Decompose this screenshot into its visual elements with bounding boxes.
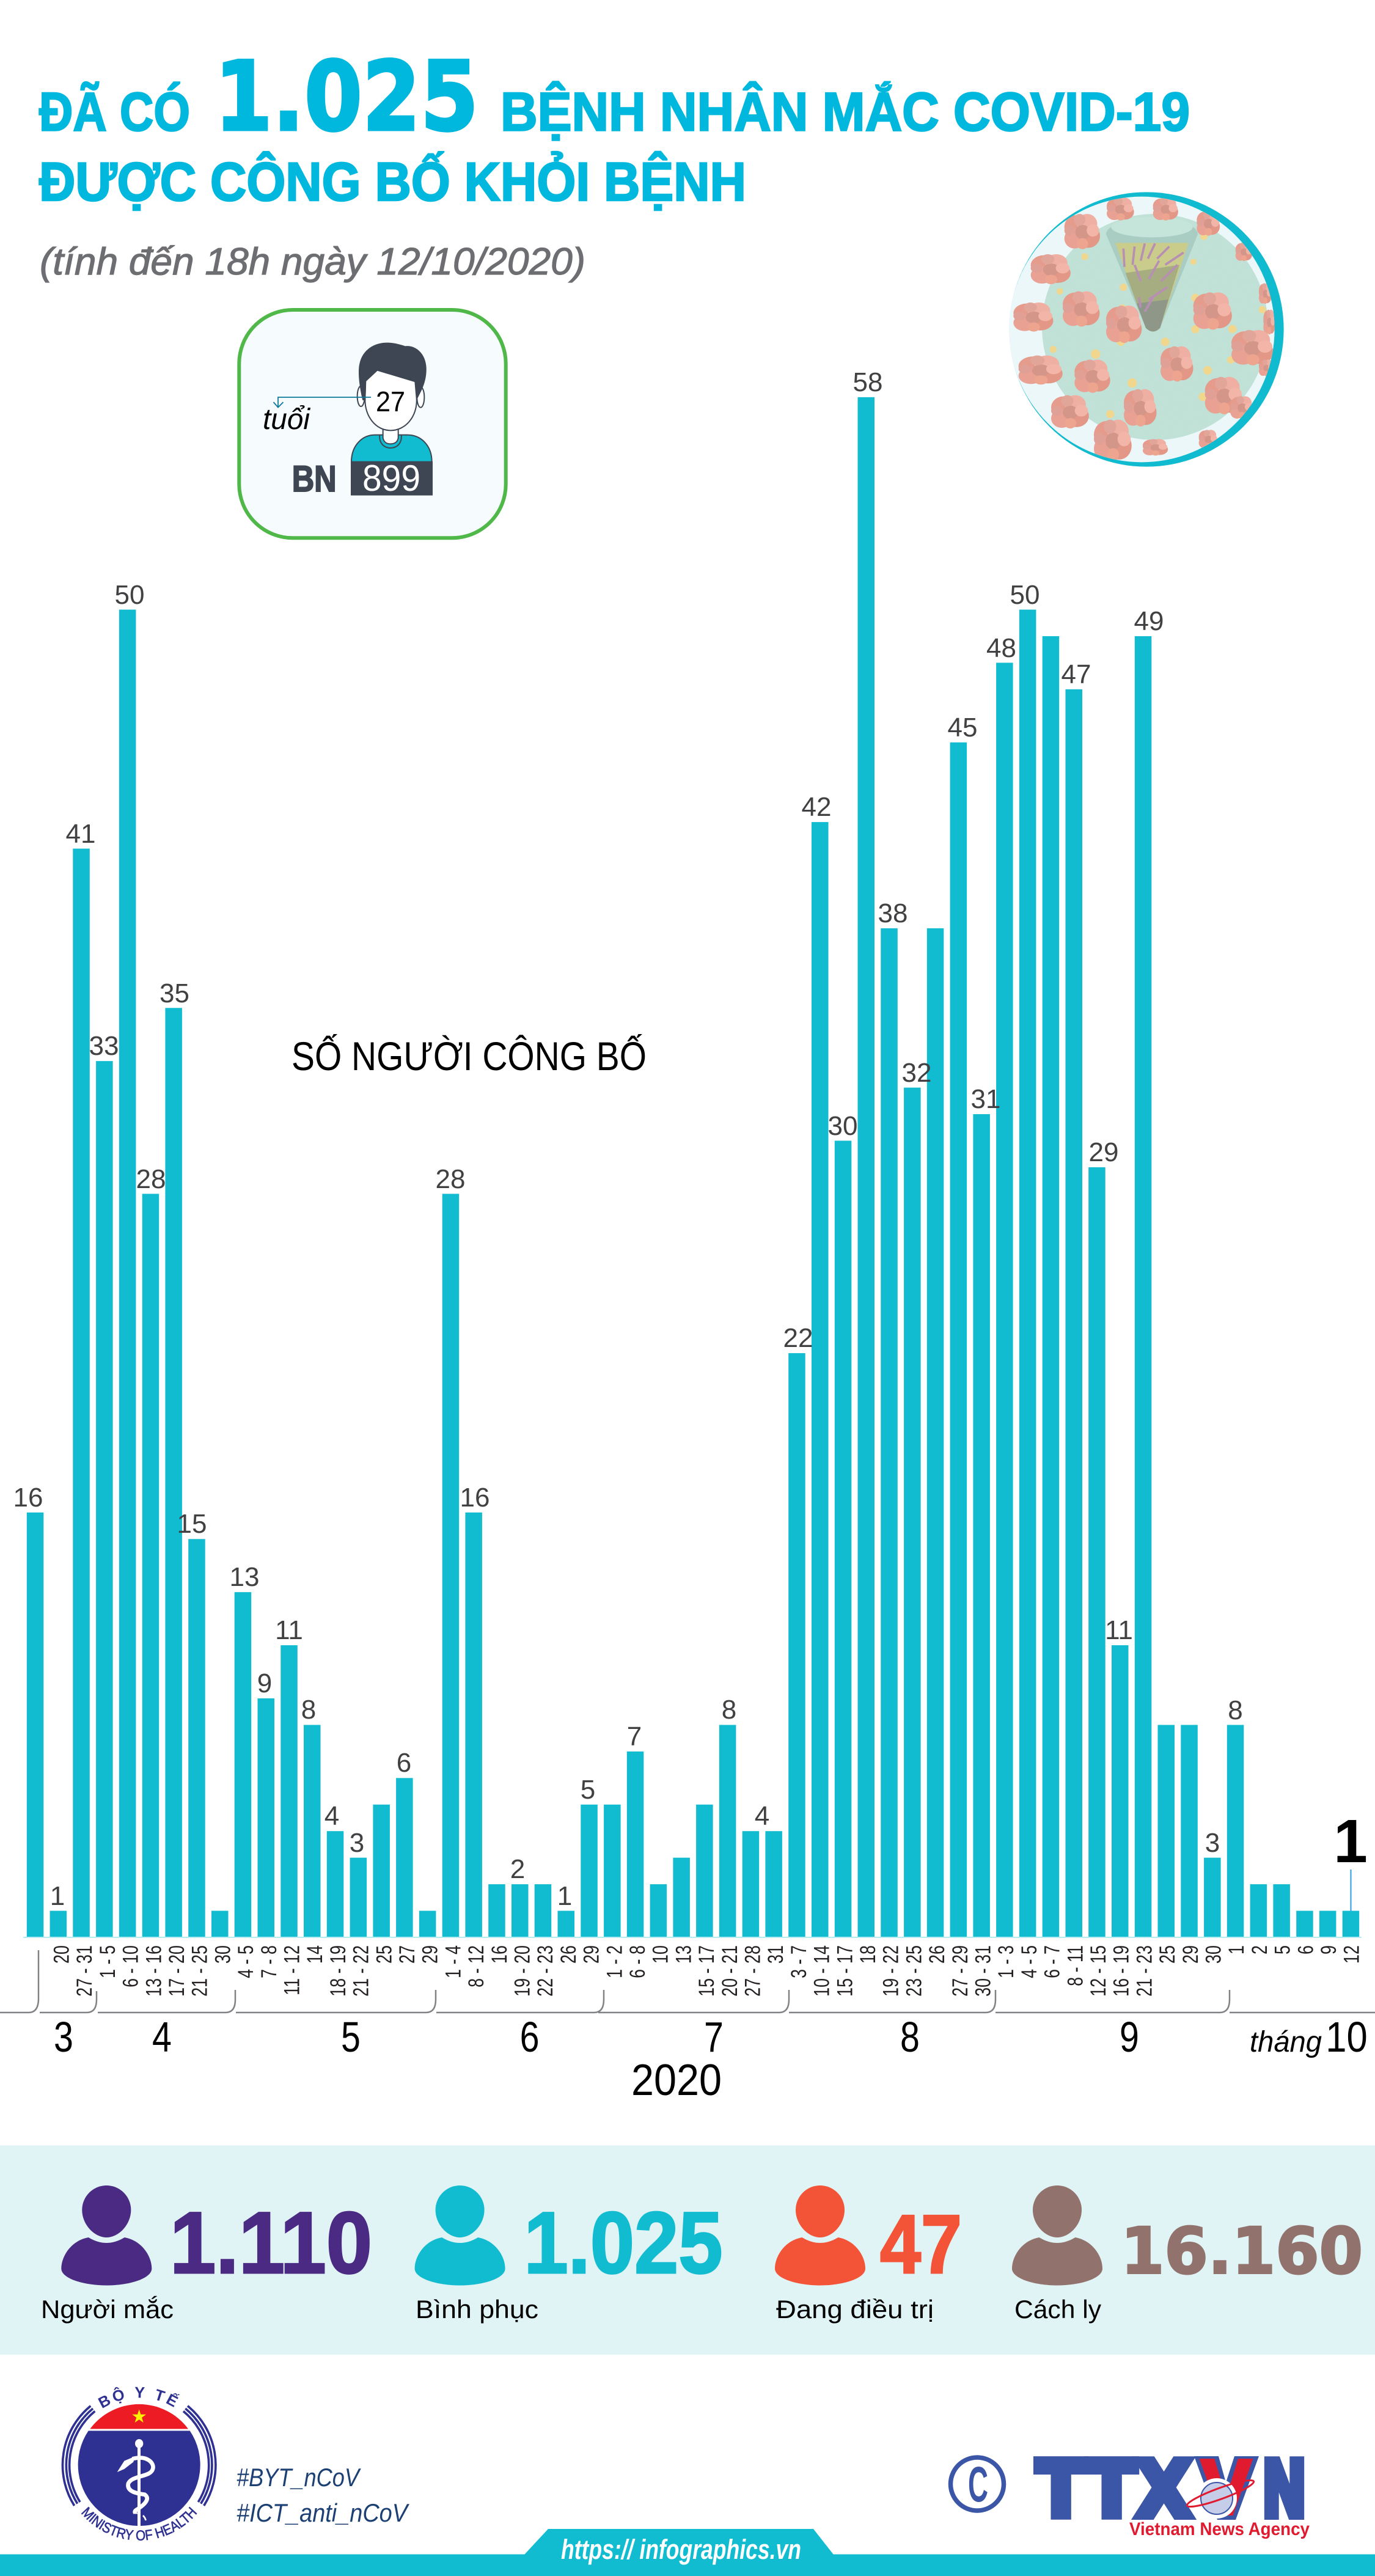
stat: recovered: Bình phục	[416, 2295, 538, 2324]
bar value labels: 33	[89, 1031, 119, 1061]
subtitle: (tính đến 18h ngày 12/10/2020)	[40, 241, 585, 283]
bar value labels: 8	[1228, 1695, 1243, 1725]
date axis labels: 27 - 29	[948, 1945, 972, 1997]
stat: infected: Người mắc	[41, 2295, 174, 2324]
bar value labels: 31	[971, 1084, 1000, 1114]
date axis labels: 16 - 19	[1109, 1945, 1134, 1997]
month labels: 7	[704, 2013, 724, 2061]
date axis labels: 16	[487, 1945, 512, 1964]
date axis labels: 15 - 17	[695, 1945, 719, 1997]
date axis labels: 17 - 20	[165, 1945, 189, 1997]
footer url: https:// infographics.vn	[561, 2534, 801, 2565]
date axis labels: 30	[211, 1945, 235, 1964]
date axis labels: 18 - 19	[326, 1945, 350, 1997]
bar value labels: 42	[802, 792, 831, 822]
date axis labels: 6	[1294, 1945, 1318, 1954]
date axis labels: 29	[418, 1945, 442, 1964]
date axis labels: 1 - 3	[994, 1945, 1018, 1978]
panel: summary statistics	[0, 2145, 1375, 2355]
title	[39, 42, 1190, 212]
bar value labels: 48	[986, 633, 1016, 663]
bar chart	[23, 397, 1362, 1938]
date axis labels: 12	[1340, 1945, 1364, 1964]
bar value labels: 50	[115, 580, 144, 610]
stat: recovered	[415, 2185, 722, 2324]
bar value labels: 15	[177, 1509, 207, 1539]
bar value labels: 16	[13, 1483, 43, 1513]
stat: under treatment: Đang điều trị	[776, 2295, 934, 2324]
bar value labels: 58	[853, 367, 882, 397]
date axis labels: 22 - 23	[534, 1945, 557, 1997]
date axis labels: 1 - 5	[96, 1945, 120, 1978]
highlighted latest value: 1	[1333, 1807, 1368, 1876]
date axis labels: 10 - 14	[810, 1945, 834, 1997]
stat: quarantine	[1012, 2185, 1363, 2324]
bar value labels: 3	[1205, 1828, 1220, 1858]
date axis labels: 25	[372, 1945, 396, 1964]
stat: infected	[41, 2185, 372, 2324]
date axis labels: 29	[1178, 1945, 1203, 1964]
age unit: tuổi	[263, 403, 310, 436]
date axis labels: 27 - 28	[741, 1945, 765, 1997]
date axis labels: 19 - 22	[879, 1945, 903, 1997]
date axis labels: 31	[764, 1945, 788, 1964]
date axis labels: 1 - 2	[603, 1945, 626, 1978]
bar value labels: 9	[257, 1668, 272, 1698]
bar value labels: 50	[1010, 580, 1040, 610]
date axis labels: 6 - 7	[1040, 1945, 1064, 1978]
patient prefix: BN	[292, 458, 337, 499]
bar value labels: 29	[1089, 1137, 1118, 1167]
bar value labels: 32	[902, 1058, 931, 1088]
date axis labels: 8 - 12	[464, 1945, 488, 1987]
date axis labels: 13 - 16	[142, 1945, 166, 1997]
panel: legend card	[239, 310, 506, 538]
bar value labels: 22	[783, 1323, 813, 1353]
bar value labels: 28	[136, 1164, 166, 1194]
icon: coronavirus illustration	[1009, 192, 1284, 467]
year label: 2020	[631, 2056, 722, 2105]
logo: Ministry of Health	[61, 2387, 217, 2541]
bar value labels: 47	[1062, 659, 1091, 689]
bar value labels	[13, 367, 1243, 1911]
age number: 27	[376, 386, 405, 417]
month word: tháng	[1250, 2026, 1322, 2058]
date axis labels: 21 - 23	[1132, 1945, 1156, 1997]
bar value labels: 11	[1105, 1615, 1133, 1645]
date axis labels: 30	[1201, 1945, 1225, 1964]
stat: quarantine: 16.160	[1121, 2214, 1363, 2288]
title line 1 start: ĐÃ CÓ	[39, 81, 190, 142]
date axis labels: 12 - 15	[1087, 1945, 1110, 1997]
date axis labels: 10	[648, 1945, 673, 1964]
month labels: 8	[900, 2013, 920, 2061]
stat: recovered: 1.025	[524, 2195, 722, 2292]
month labels: 3	[54, 2013, 73, 2061]
date axis labels: 13	[672, 1945, 695, 1964]
date axis labels: 20 - 21	[717, 1945, 742, 1997]
month labels: 4	[152, 2013, 172, 2061]
chart series label: SỐ NGƯỜI CÔNG BỐ	[292, 1033, 647, 1079]
bar value labels: 4	[755, 1801, 769, 1831]
date axis labels: 18	[856, 1945, 880, 1964]
date axis labels: 4 - 5	[1018, 1945, 1041, 1978]
footer band	[0, 2529, 1375, 2576]
date axis labels: 7 - 8	[257, 1945, 281, 1978]
date axis labels: 5	[1270, 1945, 1294, 1954]
date axis labels: 26	[925, 1945, 949, 1964]
date axis labels: 9	[1317, 1945, 1341, 1954]
bar value labels: 8	[301, 1695, 316, 1725]
date axis labels: 14	[303, 1945, 327, 1964]
date axis labels: 30 - 31	[971, 1945, 995, 1997]
bar value labels: 6	[397, 1748, 411, 1778]
date axis labels: 27	[395, 1945, 419, 1964]
bar value labels: 2	[510, 1854, 525, 1884]
month labels: 6	[520, 2013, 540, 2061]
date axis labels: 23 - 25	[902, 1945, 926, 1997]
stat: under treatment	[775, 2185, 962, 2324]
hashtags: #BYT_nCoV	[237, 2463, 361, 2492]
date axis labels: 21 - 22	[349, 1945, 373, 1997]
logo: Ministry of Health: BỘ Y TẾ	[98, 2387, 180, 2408]
hashtags: #ICT_anti_nCoV	[237, 2498, 410, 2527]
logo: TTXVN: V	[1201, 2444, 1251, 2530]
title big number: 1.025	[215, 42, 479, 153]
date axis labels	[50, 1945, 1364, 1997]
date axis labels: 26	[557, 1945, 581, 1964]
date axis labels: 8 - 11	[1063, 1945, 1087, 1986]
bar value labels: 1	[557, 1881, 572, 1911]
title line 1 end: BỆNH NHÂN MẮC COVID-19	[501, 81, 1190, 142]
date axis labels: 4 - 5	[234, 1945, 258, 1978]
logo: TTXVN: TTX	[1036, 2445, 1192, 2534]
date axis labels: 21 - 25	[188, 1945, 212, 1997]
date axis labels: 6 - 10	[119, 1945, 142, 1987]
stat: under treatment: 47	[880, 2198, 962, 2291]
bar value labels: 41	[66, 819, 95, 849]
bar value labels: 35	[160, 978, 189, 1008]
icon: copyright	[951, 2457, 1003, 2512]
date axis labels: 6 - 8	[626, 1945, 650, 1978]
month brackets	[0, 1950, 1375, 2013]
date axis labels: 3 - 7	[787, 1945, 811, 1978]
logo: TTXVN: N	[1262, 2445, 1307, 2534]
month labels	[54, 2013, 1368, 2061]
patient number: 899	[362, 458, 420, 499]
title line 2: ĐƯỢC CÔNG BỐ KHỎI BỆNH	[39, 151, 746, 212]
date axis labels: 1	[1225, 1945, 1248, 1954]
bar value labels: 45	[948, 713, 977, 743]
month labels: 10	[1326, 2013, 1368, 2061]
bar value labels: 3	[350, 1828, 364, 1858]
bar value labels: 4	[324, 1801, 339, 1831]
date axis labels: 25	[1156, 1945, 1179, 1964]
bar value labels: 30	[828, 1111, 857, 1141]
date axis labels: 11 - 12	[280, 1945, 304, 1995]
bar value labels: 28	[436, 1164, 465, 1194]
stat: infected: 1.110	[170, 2195, 372, 2292]
logo: TTXVN	[1036, 2444, 1310, 2539]
logo: Ministry of Health: MINISTRY OF HEALTH	[81, 2507, 197, 2541]
hashtags	[237, 2463, 410, 2527]
bar value labels: 8	[722, 1695, 736, 1725]
date axis labels: 27 - 31	[73, 1945, 97, 1997]
bar value labels: 1	[50, 1881, 65, 1911]
date axis labels: 2	[1248, 1945, 1272, 1954]
bar value labels: 7	[627, 1722, 642, 1752]
bar value labels: 16	[460, 1483, 490, 1513]
bar value labels: 5	[581, 1775, 595, 1805]
bar value labels: 38	[878, 898, 908, 928]
date axis labels: 20	[50, 1945, 73, 1964]
date axis labels: 19 - 20	[510, 1945, 534, 1997]
date axis labels: 1 - 4	[441, 1945, 465, 1978]
icon: age pointer arrow	[274, 397, 371, 407]
month labels: 9	[1120, 2013, 1139, 2061]
bar value labels: 13	[230, 1562, 259, 1592]
date axis labels: 29	[579, 1945, 603, 1964]
date axis labels: 15 - 17	[833, 1945, 857, 1997]
stat: quarantine: Cách ly	[1014, 2295, 1101, 2324]
bar value labels: 49	[1134, 606, 1164, 636]
agency name: Vietnam News Agency	[1129, 2519, 1310, 2539]
icon: copyright: C	[968, 2457, 988, 2512]
bar value labels: 11	[275, 1615, 303, 1645]
icon: patient figure	[351, 343, 433, 496]
month labels: 5	[341, 2013, 361, 2061]
